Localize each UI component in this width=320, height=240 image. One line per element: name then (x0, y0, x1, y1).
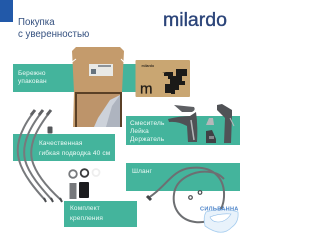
text: mounting kit: Комплект (70, 205, 100, 212)
text: mounting kit: крепления (70, 215, 103, 222)
text: flexible hose: Качественная (39, 140, 83, 147)
panel: carefully packed (13, 64, 153, 92)
text: carefully packed: Бережно (18, 70, 46, 77)
mounting cylinders (70, 182, 89, 199)
panel: faucet set label (126, 116, 240, 145)
title: Покупка (18, 17, 55, 28)
text: faucet, shower head, holder: Смеситель (130, 120, 164, 127)
title (18, 17, 89, 40)
small fitting (48, 126, 52, 134)
illustration layer (16, 47, 239, 233)
panel: mounting kit label (64, 201, 137, 227)
mounting rings (69, 169, 100, 178)
text: flexible hose: гибкая подводка 40 см (39, 150, 110, 157)
text: faucet, shower head, holder (130, 120, 164, 143)
text: hose: Шланг (132, 168, 152, 175)
shower holder (206, 118, 216, 143)
text: carefully packed: упакован (18, 78, 47, 85)
closed milardo box: m (140, 80, 152, 98)
text: flexible hose (39, 140, 110, 157)
text: faucet, shower head, holder: Держатель (130, 136, 164, 143)
text: mounting kit (70, 205, 103, 222)
flexible hoses (18, 110, 62, 202)
open cardboard box (72, 47, 124, 127)
watermark: bath icon (204, 210, 238, 232)
faucet (168, 105, 197, 142)
watermark: brand text: СИЛЬВАННА (200, 206, 239, 212)
text: carefully packed (18, 70, 47, 85)
blue corner block (0, 0, 13, 22)
text: faucet, shower head, holder: Лейка (130, 128, 149, 135)
shower hose (147, 168, 224, 222)
closed milardo box (136, 60, 190, 98)
closed milardo box: milardo (142, 64, 154, 68)
title: с уверенностью (18, 29, 89, 40)
shower head (217, 104, 234, 143)
panel: hoses label (13, 134, 115, 161)
panel: hose label (126, 163, 240, 191)
logo: milardo: milardo (163, 9, 227, 31)
